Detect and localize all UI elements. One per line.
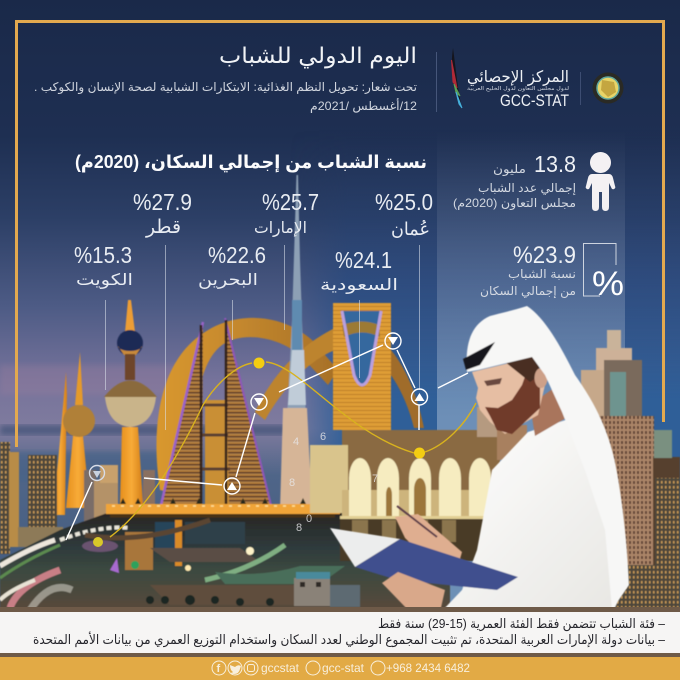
face [472,358,545,434]
footer contact bar: f [216,663,220,675]
footnotes band: – فئة الشباب تتضمن فقط الفئة العمرية (15-29) سنة فقط [378,616,666,632]
logo: GCC-STAT: المركز الإحصائي [467,69,569,87]
building: Kingdom Centre [333,303,391,430]
divider between logo and emblem [580,72,582,105]
chart: vertical guide lines [106,245,420,430]
floating numerals: 0 [306,513,312,525]
icon: percent box: % [592,265,624,303]
logo: GCC-STAT: GCC-STAT [500,91,569,110]
open book [330,528,518,590]
white headdress [467,306,629,610]
heading: youth share: نسبة الشباب من إجمالي السكان، (2020م) [75,152,427,173]
floating numerals: 7 [372,473,378,485]
header title: اليوم الدولي للشباب [219,43,417,69]
stat: Saudi Arabia [320,247,398,295]
stat: Saudi Arabia: %24.1 [335,247,392,273]
gold ribbon arcs [156,318,424,505]
stat: Qatar: %27.9 [133,189,192,215]
stat: total youth: إجمالي عدد الشباب [478,181,576,195]
stat: Qatar: قطر [145,217,181,238]
stat: Bahrain: %22.6 [208,242,266,268]
stat: Qatar [133,189,192,238]
stat: UAE: الإمارات [254,220,307,238]
logo: GCC-STAT: لدول مجلس التعاون لدول الخليج العربية [467,86,570,92]
header date: 12/أغسطس /2021م [310,98,417,114]
neck [530,385,566,436]
stat: Oman: عُمان [391,219,430,239]
floating numerals [289,431,378,534]
ground: waterfront and streets [0,496,450,612]
building: Burj Khalifa [280,175,312,510]
footer contact bar: gccstat [261,661,300,675]
stat: Kuwait [74,242,133,290]
eye and brow [484,378,502,386]
stat: total youth: مجلس التعاون (2020م) [453,196,576,211]
icon: GCC emblem [592,72,624,104]
stat: UAE [254,189,319,238]
building: right tower block [477,330,680,612]
stat: Oman: %25.0 [375,189,433,215]
stat: Oman [375,189,433,239]
stat: Saudi Arabia: السعودية [320,277,398,295]
lower hand [382,572,445,612]
background sky [0,137,680,607]
floating numerals: 4 [293,436,299,448]
chart: white connector lines and markers [66,333,468,540]
man reading a book [330,306,629,612]
city skyline illustration [0,175,680,612]
logo: GCC-STAT [452,48,570,110]
stat: youth share of population: من إجمالي السكان [480,284,576,299]
stat: youth share of population [480,242,576,299]
towers: Kuwait Towers [53,300,157,515]
beard [485,368,540,434]
footer contact bar [0,657,680,680]
hair and ear [505,355,540,382]
panel: translucent summary column [437,130,625,610]
header subtitle: تحت شعار: تحويل النظم الغذائية: الابتكارات الشبابية لصحة الإنسان والكوكب . [34,80,417,95]
building: Bahrain World Trade Centre [161,318,271,505]
footer contact bar: +968 2434 6482 [386,661,470,675]
stat: total youth: 13.8 [534,151,576,177]
black agal [463,342,495,370]
stat: Kuwait: %15.3 [74,242,132,268]
stat: total youth [453,151,576,211]
upper hand and pen [395,506,462,566]
footer contact bar: gcc-stat [322,661,365,675]
floating numerals: 8 [296,522,302,534]
stat: Bahrain: البحرين [198,272,258,290]
chart: yellow curve [93,358,476,547]
floating numerals: 8 [289,477,295,489]
robe [441,418,628,612]
stat: youth share of population: نسبة الشباب [508,267,576,281]
stat: Kuwait: الكويت [76,272,133,290]
stat: youth share of population: %23.9 [513,242,576,269]
floating numerals: 6 [320,431,326,443]
stat: total youth: مليون [493,162,526,177]
icon: percent box [584,244,624,303]
building: arcade with lit arches [310,430,500,561]
buildings: left downtown [0,442,155,554]
gold frame [16,22,664,447]
divider between title and logo [436,52,438,112]
stat: Bahrain [198,242,266,290]
icon: person [586,152,615,211]
stat: UAE: %25.7 [262,189,319,215]
footnotes band [0,607,680,657]
